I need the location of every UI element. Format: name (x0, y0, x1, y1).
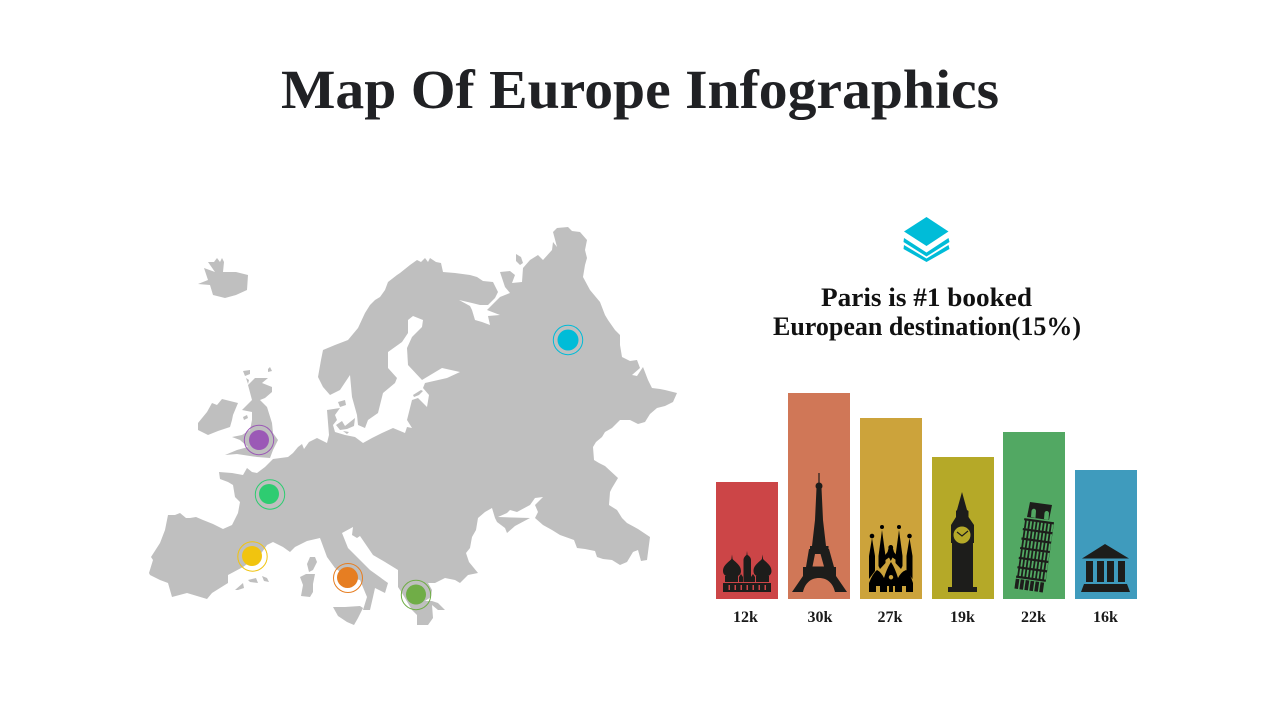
Corsica (307, 557, 317, 572)
value labels: 22k (1021, 609, 1046, 626)
Great Britain (225, 378, 278, 458)
Ireland (198, 399, 238, 435)
bar: 22k (1003, 432, 1065, 599)
value labels: 27k (878, 609, 903, 626)
mainland Europe (149, 227, 677, 625)
icon: Russian cathedral (723, 551, 772, 592)
value labels (733, 609, 1118, 626)
icon: Leaning Tower of Pisa (1015, 502, 1054, 588)
Sardinia (300, 574, 315, 597)
icon: Sagrada Familia (869, 525, 913, 592)
headline text: Paris is #1 booked (821, 283, 1033, 312)
icon: classical building (1081, 544, 1130, 592)
map pin: green (255, 480, 285, 509)
bar: 30k (788, 393, 850, 599)
bar: 27k (860, 418, 922, 599)
icon: Big Ben (948, 492, 977, 592)
bar chart (716, 393, 1137, 626)
map pin: light green (401, 580, 431, 610)
bar: 16k (1075, 470, 1137, 599)
Shetland and small islands (243, 367, 272, 420)
value labels: 16k (1093, 609, 1118, 626)
headline text (773, 283, 1081, 341)
bar: 19k (932, 457, 994, 599)
map pin: cyan (553, 325, 583, 355)
Baltic and Danish islands (336, 254, 523, 434)
bar: 12k (716, 482, 778, 599)
headline text: European destination(15%) (773, 312, 1081, 341)
value labels: 12k (733, 609, 758, 626)
map pin: yellow (238, 542, 267, 571)
icon: Eiffel Tower (792, 473, 847, 592)
Iceland (198, 258, 248, 298)
map of Europe (149, 227, 677, 625)
title: Map Of Europe Infographics (281, 59, 999, 120)
Balearic islands (235, 576, 269, 590)
icon: layers (904, 217, 950, 262)
value labels: 19k (950, 609, 975, 626)
value labels: 30k (808, 609, 833, 626)
map pin: purple (244, 425, 274, 455)
map pin: orange (334, 564, 362, 592)
Sicily (333, 606, 363, 625)
belfry (1027, 502, 1052, 520)
